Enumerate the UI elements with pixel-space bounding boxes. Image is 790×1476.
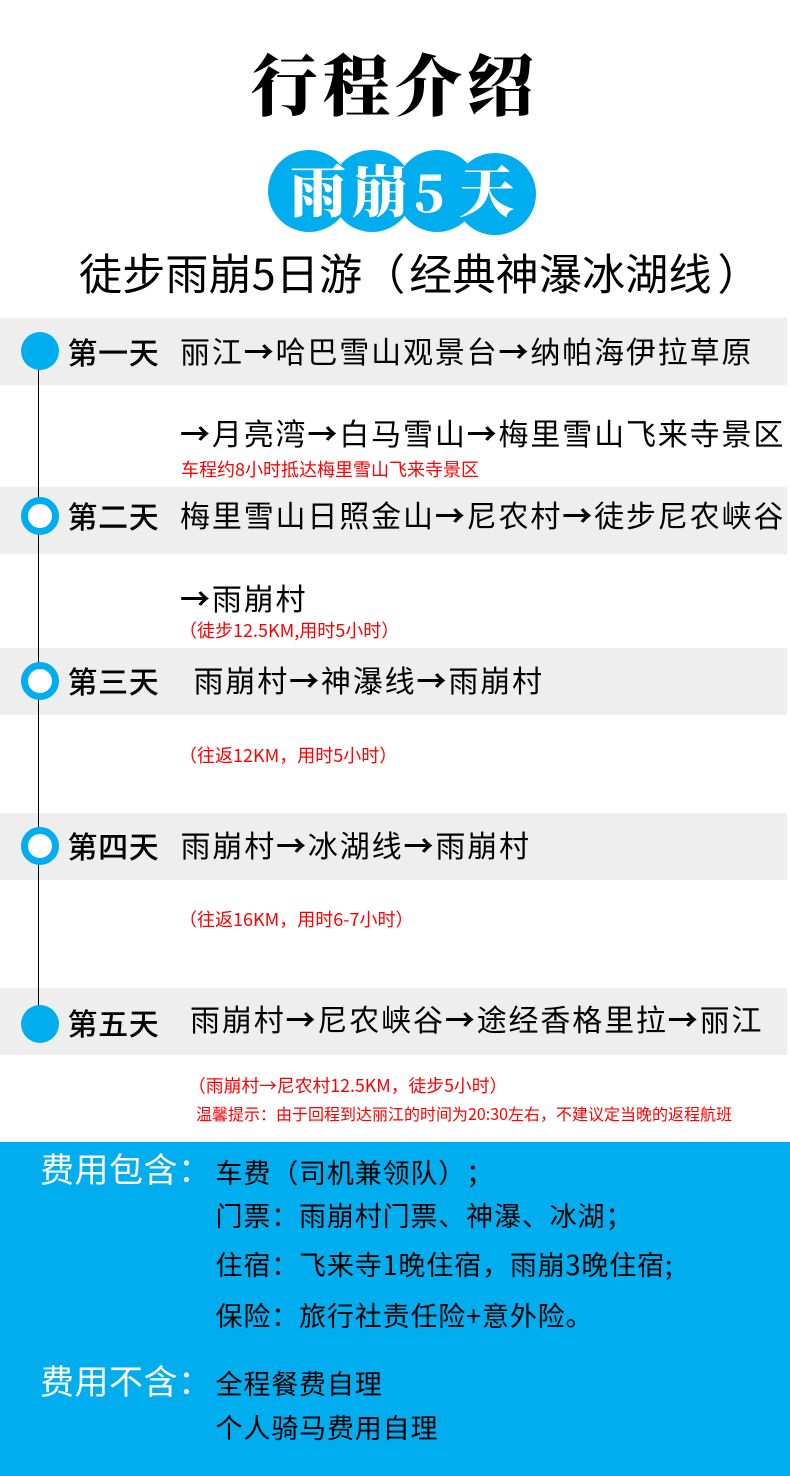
band: day 5 [0,988,787,1055]
heading: included: 费用包含： [40,1143,212,1192]
route: day 4: 雨崩村→冰湖线→雨崩村 [180,822,531,866]
badge circles [268,150,536,235]
route: day 1 line 2: →月亮湾→白马雪山→梅里雪山飞来寺景区 [180,410,785,454]
marker: day 3 [21,662,59,700]
marker: day 2 [21,497,59,535]
note: day 4: （往返16KM，用时6-7小时） [179,906,413,932]
route: day 5: 雨崩村→尼农峡谷→途经香格里拉→丽江 [190,996,763,1040]
label: day 3: 第三天 [68,658,159,702]
label: day 5: 第五天 [68,1000,159,1044]
label: day 4: 第四天 [68,823,159,867]
band: day 3 [0,648,787,715]
route: day 3: 雨崩村→神瀑线→雨崩村 [194,657,544,701]
excluded: horse riding: 个人骑马费用自理 [216,1407,438,1446]
band: day 2 [0,487,787,554]
included: lodging: 住宿：飞来寺1晚住宿，雨崩3晚住宿; [216,1244,673,1283]
badge: 雨崩5天 [268,149,536,235]
note: day 2: （徒步12.5KM,用时5小时） [179,617,399,643]
included: tickets: 门票：雨崩村门票、神瀑、冰湖； [216,1195,633,1234]
badge text: 雨崩5天 [290,149,521,229]
included: insurance: 保险：旅行社责任险+意外险。 [216,1295,593,1334]
panel: costs [0,1142,790,1476]
marker: day 1 [21,332,59,370]
label: day 2: 第二天 [68,493,159,537]
timeline line [38,350,39,1020]
route: day 1 line 1: 丽江→哈巴雪山观景台→纳帕海伊拉草原 [180,328,753,372]
route: day 2 line 1: 梅里雪山日照金山→尼农村→徒步尼农峡谷 [180,492,785,536]
note: day 3: （往返12KM，用时5小时） [179,742,397,768]
label: day 1: 第一天 [68,329,159,373]
note: day 5 line 1: （雨崩村→尼农村12.5KM，徒步5小时） [188,1072,507,1098]
marker: day 4 [21,827,59,865]
heading: excluded: 费用不含： [40,1355,212,1404]
marker: day 5 [21,1005,59,1043]
band: day 4 [0,813,787,880]
route: day 2 line 2: →雨崩村 [180,575,307,619]
subtitle: 徒步雨崩5日游（经典神瀑冰湖线） [79,241,761,303]
included: transport: 车费（司机兼领队）； [216,1152,494,1191]
band: day 1 [0,318,787,385]
note: day 5 line 2: 温馨提示：由于回程到达丽江的时间为20:30左右，不建议定当晚的返程航班 [196,1101,732,1125]
title: 行程介绍 [251,34,539,130]
excluded: meals: 全程餐费自理 [216,1363,383,1402]
note: day 1: 车程约8小时抵达梅里雪山飞来寺景区 [181,456,479,482]
